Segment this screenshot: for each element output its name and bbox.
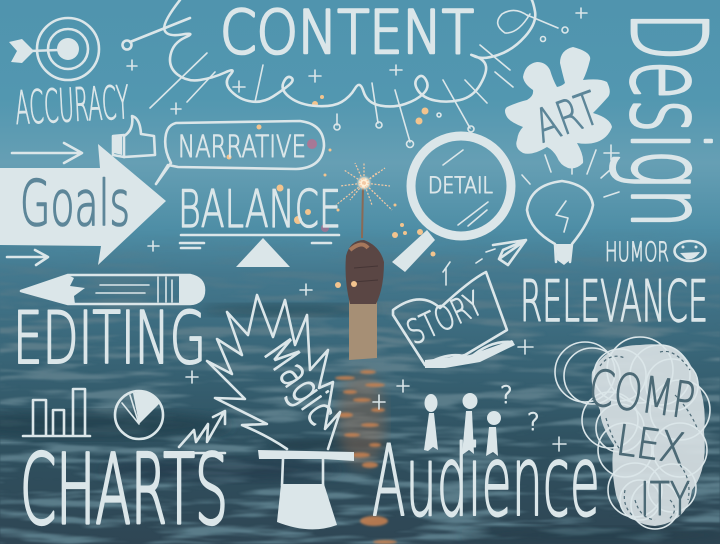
sparkle plus marks — [148, 241, 566, 451]
section: balance — [178, 180, 341, 267]
arrow: small upper — [12, 143, 82, 163]
icon: paint splat with art label — [505, 47, 612, 168]
icon: magic hat with burst — [207, 295, 354, 529]
icon: pencil — [21, 275, 204, 304]
icon: bar chart — [23, 389, 90, 436]
icon: question marks — [500, 381, 540, 436]
icon: light bulb — [522, 145, 619, 265]
icon: target with arrow — [9, 18, 99, 80]
heading: editing: EDITING — [13, 296, 206, 380]
speech bubble: narrative — [156, 121, 324, 184]
icon: question marks: ? — [527, 408, 540, 436]
icon: question marks: ? — [500, 381, 513, 409]
icon: pie chart — [115, 391, 163, 439]
label: story: STORY — [401, 284, 488, 353]
arrow: small lower — [7, 250, 48, 265]
hat — [258, 450, 354, 461]
icon: fulcrum triangle — [236, 238, 290, 267]
icon: paper plane — [443, 240, 526, 285]
photo: raised fist and arm — [346, 240, 384, 360]
flourish: looping line with pins — [122, 0, 587, 148]
icon: trend arrow — [178, 411, 225, 453]
burst of zigzags — [207, 295, 340, 449]
icon: open book — [393, 272, 515, 368]
label: detail: DETAIL — [428, 174, 493, 199]
icon: audience figures — [424, 393, 501, 456]
icon: smiley face — [674, 241, 706, 261]
arrow: goals — [0, 144, 166, 265]
label: ity: ITY — [640, 472, 690, 526]
heading: balance: BALANCE — [178, 180, 341, 240]
scribble cloud: complexity — [555, 337, 710, 529]
label: humor: HUMOR — [605, 237, 669, 268]
icon: magnifying glass with detail label — [392, 136, 511, 272]
label: magic: Magic — [254, 330, 347, 433]
label: art: ART — [527, 81, 606, 153]
icon: thumbs up — [113, 116, 155, 157]
label: lex: LEX — [614, 415, 688, 473]
heading: charts: CHARTS — [20, 434, 228, 544]
infographic canvas: ACCURACY — [14, 75, 130, 135]
label: narrative: NARRATIVE — [178, 130, 306, 165]
heading: goals: Goals — [20, 167, 130, 240]
photo: sparkler — [226, 95, 436, 288]
heading: content: CONTENT — [220, 0, 474, 68]
